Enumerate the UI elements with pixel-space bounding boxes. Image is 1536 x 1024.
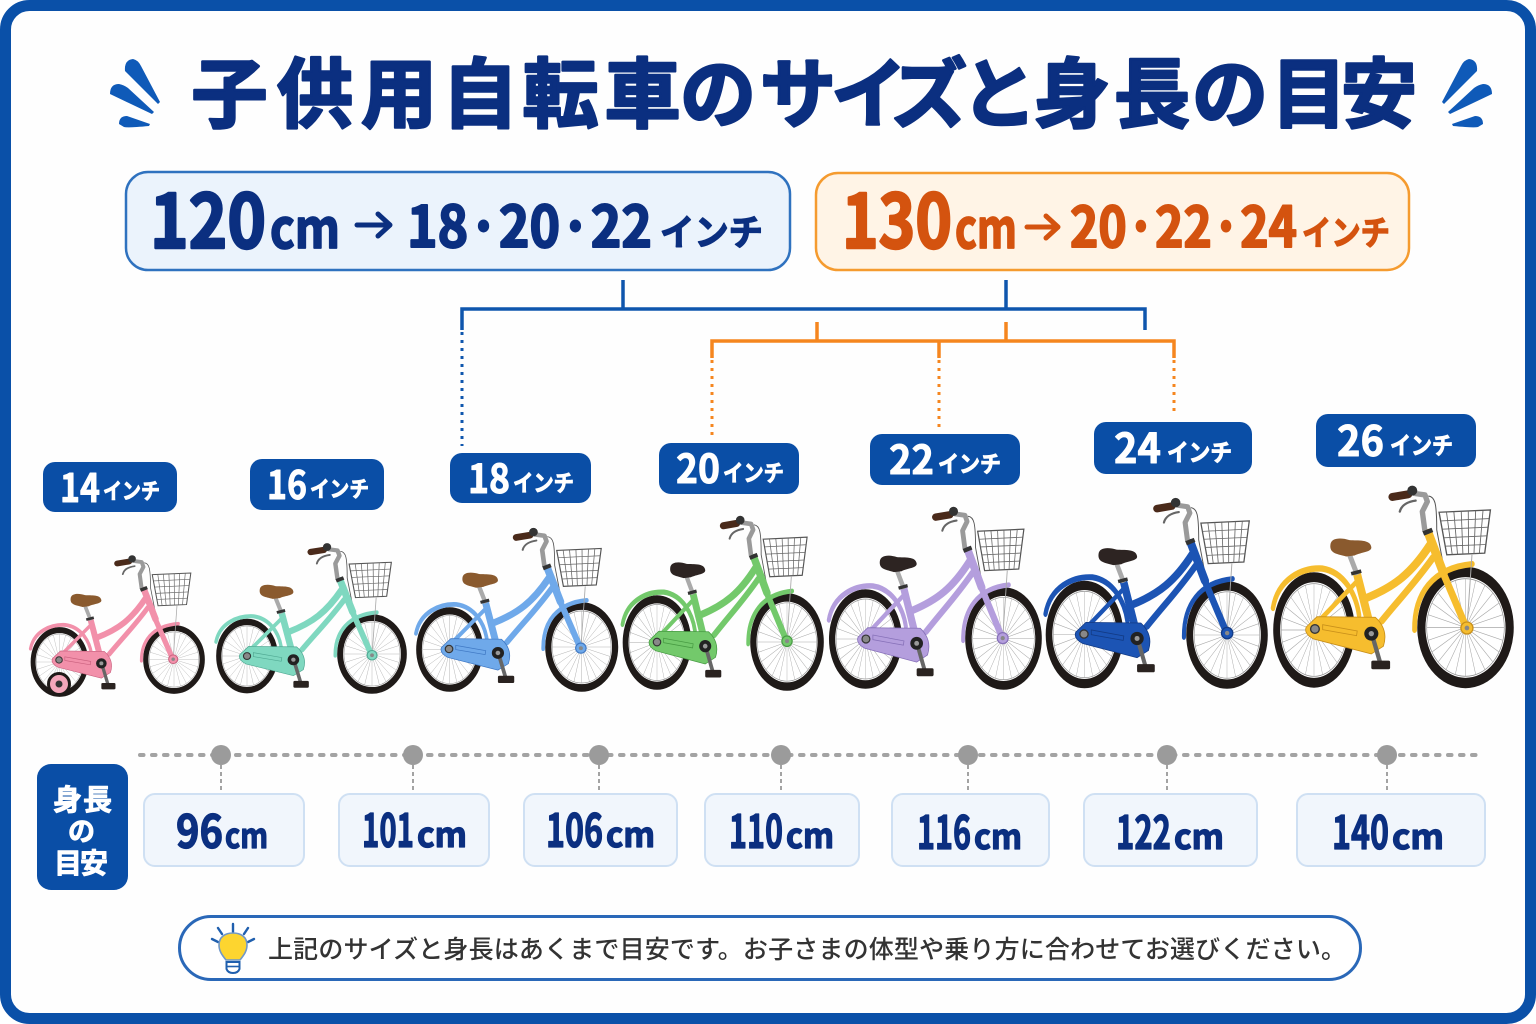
connector: blue bracket for 120cm [462,280,1145,446]
bike: 24 inch navy blue [1046,498,1264,684]
label: height guide: の [68,810,95,849]
panel: 130cm sizes: 20·22·24 [1070,183,1297,264]
badge: 26 inch: 26 [1337,408,1384,469]
icon: light bulb [212,924,254,973]
height: 116cm: cm [974,810,1022,859]
badge: 22 inch: 22 [889,428,934,486]
label: height guide: 目安 [54,842,108,882]
height: 96cm: 96 [176,796,223,862]
label: height guide: 身長 [53,777,112,819]
height: 96cm: cm [225,809,268,858]
panel: 130cm sizes: インチ [1302,206,1390,255]
badge: 24 inch [1094,415,1252,475]
badge: 16 inch: インチ [310,472,369,504]
bike: 18 inch light blue [416,528,615,688]
title text: 子供用自転車のサイズと身長の目安 [192,34,1417,144]
badge: 20 inch: 20 [676,437,720,495]
badge: 14 inch: 14 [60,458,100,514]
badge: 22 inch [870,428,1020,486]
height: 106cm [524,794,677,866]
panel: 130cm sizes: cm [955,185,1017,264]
panel: 120cm sizes [126,163,790,270]
height: 140cm: cm [1392,810,1444,859]
bike: 26 inch yellow [1273,486,1510,683]
icon: left sparkle [110,59,160,127]
height: 140cm [1297,794,1485,866]
badge: 16 inch: 16 [267,455,307,511]
height: 106cm: 106 [546,795,603,861]
bike: 16 inch teal [216,543,404,690]
title [110,34,1417,144]
badge: 18 inch: 18 [468,447,510,505]
arrow [357,214,390,236]
height: 122cm: 122 [1116,797,1171,863]
bike: 14 inch pink with training wheel [30,555,202,694]
connector: orange bracket for 130cm [712,322,1174,436]
height: 110cm [705,794,859,866]
height: 106cm: cm [606,808,655,857]
height: 116cm [892,794,1049,866]
height: 101cm: cm [417,808,467,857]
badge: 26 inch [1316,408,1476,469]
bike: 22 inch purple [829,507,1039,685]
height timeline [140,745,1483,794]
badge: 24 inch: インチ [1167,433,1232,468]
height: 101cm [339,794,489,866]
panel: 130cm sizes: 130 [842,163,952,270]
badge: 14 inch: インチ [103,474,160,506]
badge: 14 inch [43,458,177,514]
arrow [1027,216,1058,238]
badge: 22 inch: インチ [938,445,1001,479]
height: 122cm: cm [1174,810,1224,859]
panel: 120cm sizes: インチ [660,204,763,256]
panel: 130cm sizes [816,163,1409,270]
badge: 20 inch: インチ [723,454,784,488]
badge: 24 inch: 24 [1114,415,1161,475]
height: 101cm: 101 [362,795,414,861]
height: 116cm: 116 [917,797,971,863]
badge: 16 inch [250,455,384,511]
height: 110cm: 110 [729,796,783,862]
height: 122cm [1084,794,1257,866]
callout: note: 上記のサイズと身長はあくまで目安です。お子さまの体型や乗り方に合わせてお選びください。 [268,930,1346,966]
badge: 26 inch: インチ [1390,426,1453,461]
height: 110cm: cm [786,809,834,858]
panel: 120cm sizes: 18·20·22 [407,182,652,264]
bike: 20 inch green [622,516,821,687]
badge: 18 inch [450,447,591,505]
panel: 120cm sizes: cm [270,185,340,264]
badge: 20 inch [659,437,799,495]
panel: 120cm sizes: 120 [150,163,266,270]
height: 96cm [144,794,304,866]
badge: 18 inch: インチ [513,464,574,498]
height: 140cm: 140 [1332,797,1389,863]
label: height guide [37,764,128,890]
callout: note [180,916,1360,980]
icon: right sparkle [1442,59,1492,127]
